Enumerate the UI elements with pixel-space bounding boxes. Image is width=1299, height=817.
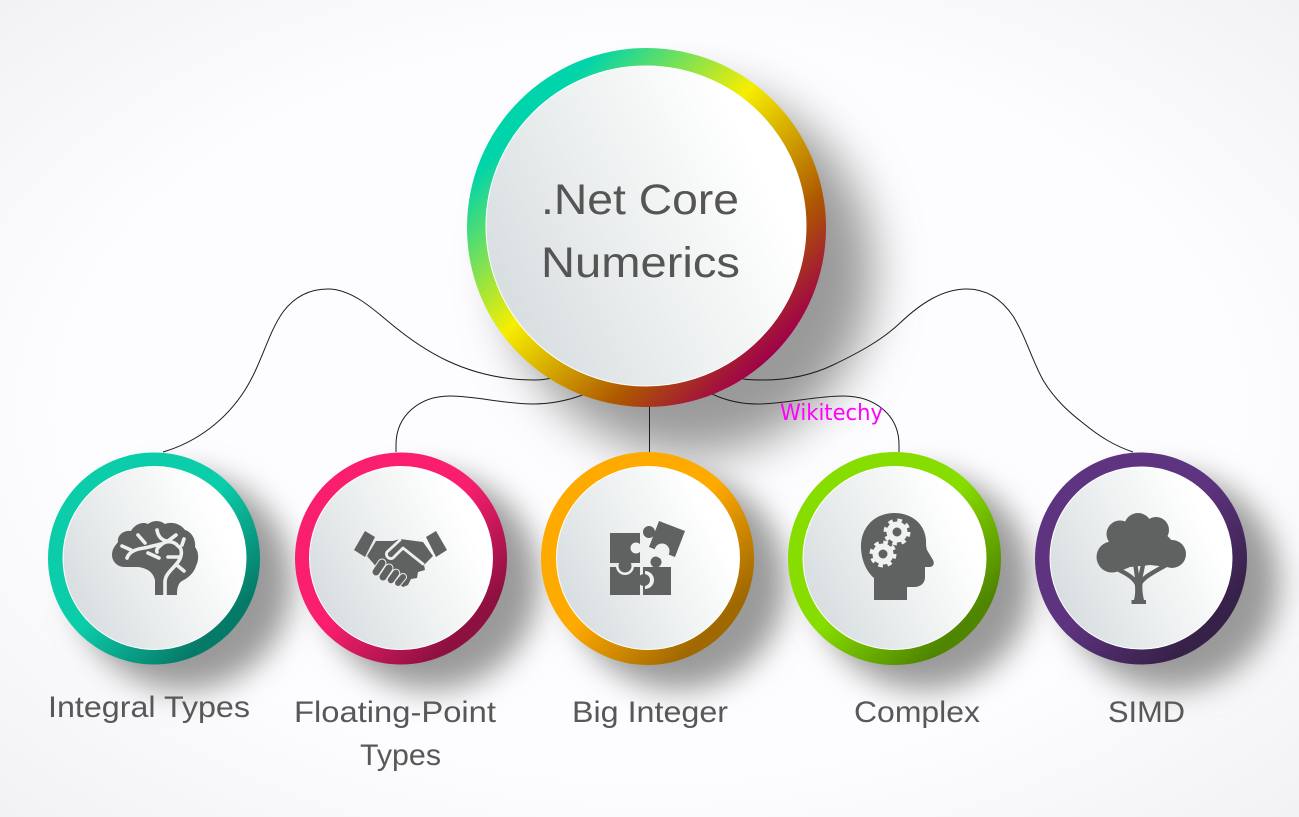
node: SIMD [1035,452,1247,664]
main circle [467,48,826,407]
node: Complex [788,452,1001,665]
icon: tree [1096,513,1186,604]
label: SIMD: SIMD [1108,696,1185,729]
watermark: Wikitechy: Wikitechy [780,401,883,426]
label: Integral Types: Integral Types [48,691,250,724]
main title: Numerics [541,239,740,287]
drop shadows [76,89,1279,690]
icon: handshake [354,531,447,587]
label: Floating-Point Types: Types [360,739,441,772]
main title [541,176,740,287]
label: Floating-Point Types: Floating-Point [294,696,497,729]
icon: puzzle pieces [610,521,685,595]
icon: brain [112,521,198,596]
connector lines [163,289,1133,452]
node: Floating-Point Types [295,452,507,664]
label: Complex: Complex [854,696,980,729]
label: Floating-Point Types [294,696,497,772]
node: Big Integer [541,452,754,665]
label: Big Integer: Big Integer [572,696,728,729]
main title: .Net Core [541,176,739,224]
node: Integral Types [48,452,260,664]
icon: head with gears [861,513,934,600]
